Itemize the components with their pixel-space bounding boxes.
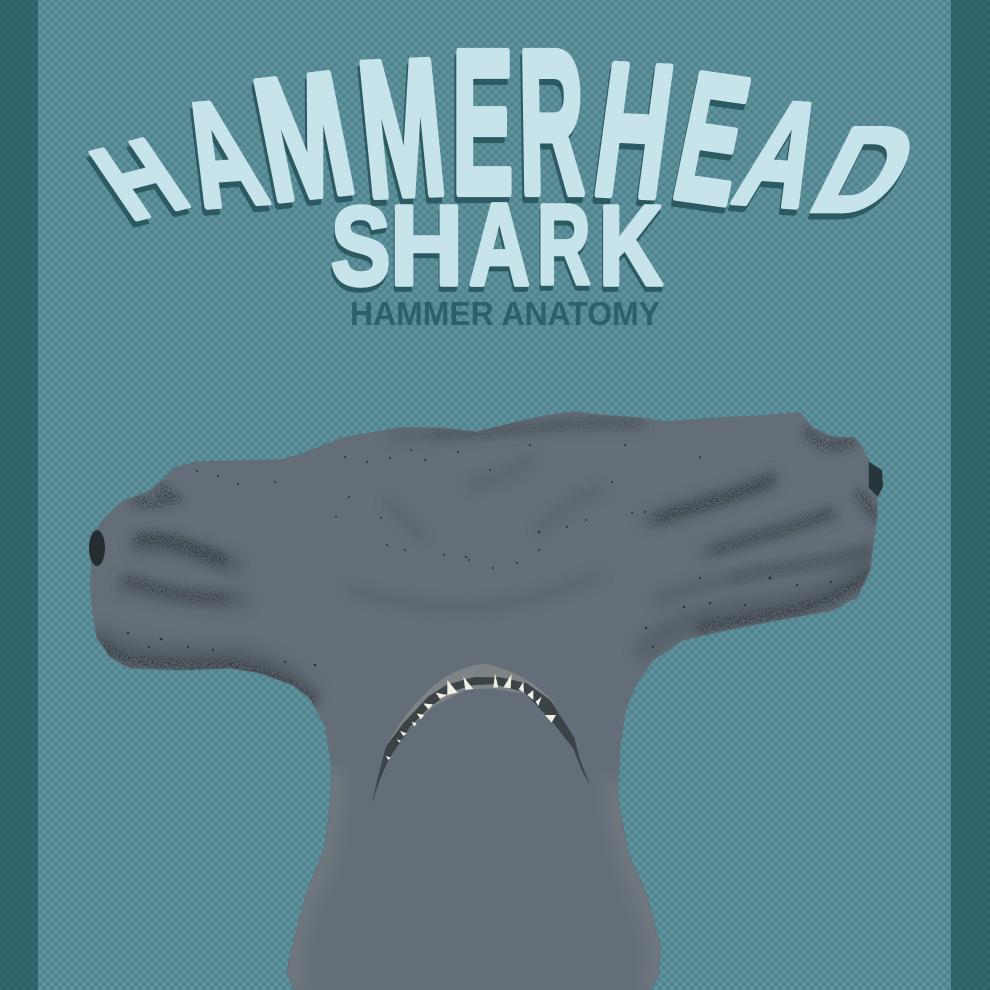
title: HAMMERHEAD, arched letters: A	[719, 71, 847, 239]
mouth interior	[372, 677, 589, 802]
title: HAMMERHEAD, arched letters: H	[583, 29, 681, 243]
skin texture: lighter edge of neck	[292, 770, 658, 990]
skin texture: dark speckled shading	[100, 421, 876, 700]
skin texture: broad soft shading	[100, 424, 870, 695]
title: HAMMERHEAD, arched letters: E	[450, 13, 511, 243]
title: SHARK: R	[536, 188, 589, 313]
hammerhead shark head	[89, 412, 883, 990]
title: HAMMERHEAD, arched letters: R	[517, 8, 586, 237]
skin texture: speckled dots	[127, 444, 832, 666]
title: HAMMERHEAD, arched letters	[69, 7, 939, 249]
title: HAMMERHEAD, arched letters: M	[239, 41, 365, 244]
subtitle: HAMMER ANATOMY	[350, 295, 660, 332]
title: SHARK: H	[389, 187, 462, 314]
title: HAMMERHEAD, arched letters: A	[717, 77, 845, 245]
title: HAMMERHEAD, arched letters: M	[351, 19, 453, 238]
title: HAMMERHEAD, arched letters: M	[241, 35, 367, 238]
mouth	[372, 664, 589, 802]
title: SHARK: S	[330, 190, 389, 314]
title: SHARK: A	[469, 180, 530, 310]
teeth	[386, 673, 556, 760]
title: SHARK: K	[599, 183, 663, 309]
title: HAMMERHEAD, arched letters: A	[155, 77, 281, 245]
title: HAMMERHEAD, arched letters: A	[157, 71, 283, 239]
title: HAMMERHEAD, arched letters: E	[661, 34, 763, 243]
title: SHARK: H	[390, 182, 463, 309]
title: SHARK: K	[598, 188, 662, 314]
title: SHARK: R	[537, 183, 590, 308]
title: HAMMERHEAD, arched letters: H	[69, 123, 207, 248]
title: HAMMERHEAD, arched letters: M	[349, 25, 451, 244]
title: HAMMERHEAD, arched letters: D	[790, 108, 937, 242]
title: HAMMERHEAD, arched letters: R	[515, 14, 584, 243]
title: HAMMERHEAD, arched letters: E	[452, 7, 513, 237]
title: SHARK: S	[331, 185, 390, 309]
eye: left	[89, 530, 105, 566]
head silhouette	[91, 412, 877, 990]
title: HAMMERHEAD, arched letters: H	[71, 117, 209, 242]
title: HAMMERHEAD, arched letters: E	[659, 40, 761, 249]
title: SHARK: A	[468, 185, 529, 315]
upper gum	[385, 664, 555, 748]
eye: right	[866, 460, 883, 498]
title: HAMMERHEAD, arched letters: D	[792, 102, 939, 236]
title: HAMMERHEAD, arched letters: H	[585, 23, 683, 237]
title: SHARK	[330, 180, 663, 315]
